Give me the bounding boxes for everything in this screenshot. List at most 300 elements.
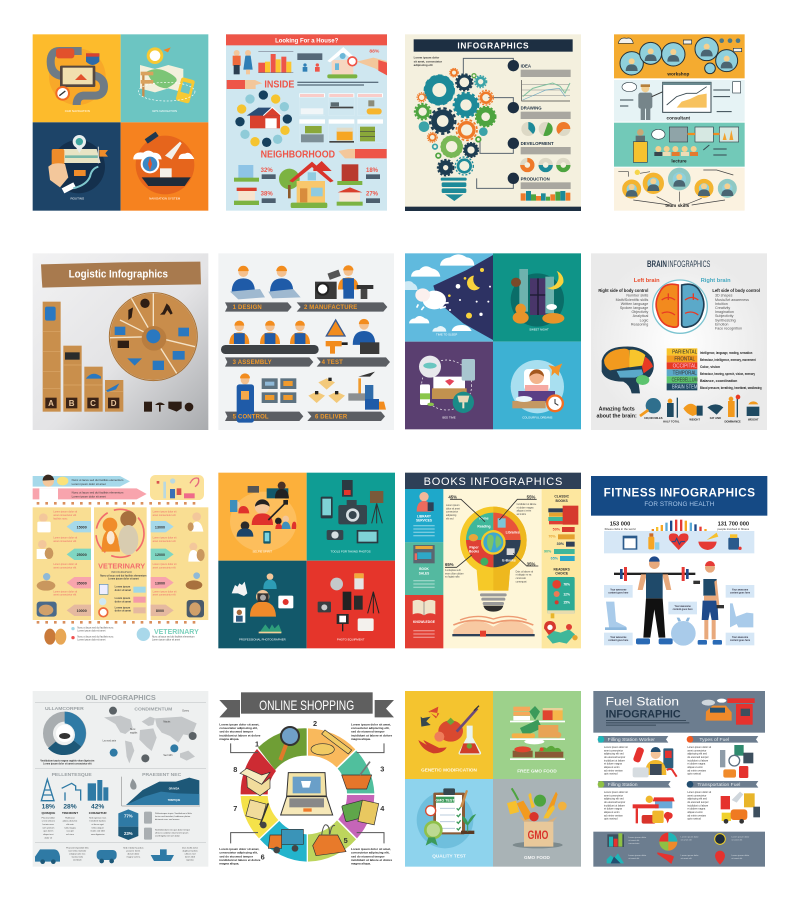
section body text: ad minim veniam [687, 814, 706, 817]
section body text: amet consectetur [604, 749, 623, 752]
left column: amet consectetur elit [53, 566, 77, 569]
centre column: dolor sit amet [115, 589, 131, 592]
centre column: INFOGRAPHIC [111, 570, 133, 574]
world map: Nunc [130, 729, 136, 731]
hexagon statistic: Pellentesque turpis. Vestibulum id felis [155, 812, 192, 815]
stat columns: tellus aliquet [92, 826, 104, 829]
step arrows [225, 302, 390, 421]
segment numbers: 3 [380, 764, 384, 773]
title: INFOGRAPHICS [457, 41, 529, 51]
connector lines [463, 58, 513, 188]
info callouts: content goes here [730, 591, 751, 594]
percent figures: 27% [366, 191, 379, 197]
section body text: Lorem ipsum dolor sit [687, 746, 711, 749]
text block [297, 53, 322, 72]
footer panel: sit amet elit [628, 857, 640, 860]
footer panel: sit amet elit [681, 857, 692, 860]
stat columns: platea dictumst [63, 820, 78, 823]
centre column: Lorem ipsum [115, 597, 131, 600]
percentage callouts: Lorem ipsum [446, 504, 460, 507]
world map: Sed nibh [163, 755, 173, 757]
left column: knowledge [405, 595, 443, 648]
percentage callouts: 55% [527, 495, 535, 500]
stat columns: sem dignissim [91, 834, 105, 836]
stat columns: CURABITUR [89, 811, 107, 815]
lobes table: OCCIPITAL [673, 364, 697, 370]
left column: book sales [405, 542, 443, 595]
section body text: quis nostrud [687, 773, 701, 776]
light bulb pie: E-Books [502, 559, 516, 563]
band: team skills: team skills [665, 203, 690, 208]
header: INFOGRAPHIC [606, 708, 681, 720]
lobes table: Color, vision [700, 365, 720, 369]
hexagon statistic: dictumst nunc sed massa [155, 818, 180, 821]
panel: oil infographics [33, 691, 208, 867]
stacked bars A-D: C [90, 399, 96, 408]
neighbourhood buildings [234, 164, 363, 206]
gmo food bag [507, 788, 567, 848]
statistics: people involved in fitness [718, 527, 750, 531]
centre column: Lorem ipsum [115, 586, 131, 589]
worker illustration [633, 747, 677, 777]
stat columns: at lacus eget [92, 823, 104, 826]
quality test clipboard: GMO TEST [435, 798, 455, 802]
info callouts: content goes here [730, 639, 751, 642]
left list: Objectivity [631, 310, 648, 314]
label: TOOLS FOR TAKING PHOTOS [331, 549, 371, 553]
right list: Face recognition [715, 327, 742, 331]
hexagon statistic: sed fringilla nisl sem dolor [155, 835, 180, 838]
percentage callouts: 65% [445, 562, 454, 567]
percentage callouts: Duis ut labore sit [516, 570, 533, 573]
right column: 13000 [155, 581, 165, 585]
footer panel: sit amet elit [731, 857, 743, 860]
vehicles row: Duis mollis tortor [182, 846, 198, 849]
left brain heading: Left brain [634, 278, 660, 284]
left column: Lorem ipsum dolor sit [53, 590, 77, 593]
light bulb pie: Paper [469, 545, 479, 549]
sweet night scene [511, 269, 564, 327]
right column: amet consectetur elit [153, 540, 176, 543]
open book [452, 616, 535, 637]
right list [712, 288, 760, 331]
world map: Donec [182, 711, 190, 713]
amazing facts: 100,000 MILES [644, 416, 663, 420]
stat columns: mattis sed nibh [90, 830, 106, 833]
vehicles row [35, 846, 198, 864]
corner text: sed do eiusmod tempor [351, 730, 385, 734]
right list: Subjectivity [715, 314, 734, 318]
section body text: aliqua ut enim [687, 811, 703, 814]
footer: Nunc ut lacus sed dui facilisis elementum [152, 636, 195, 639]
dotted dividers [37, 503, 197, 622]
left column: knowledge: KNOWLEDGE [413, 620, 436, 624]
footer panel: sit amet elit [681, 838, 692, 841]
stat columns [41, 772, 108, 839]
title: BOOKS INFOGRAPHICS [424, 476, 563, 488]
left column: Lorem ipsum dolor sit [53, 537, 77, 540]
right list: 3D shapes [715, 294, 733, 298]
header [593, 691, 765, 733]
right column: readers choice [544, 567, 578, 644]
vehicles row: dictum dolor [127, 852, 139, 855]
section body text: amet consectetur [687, 749, 707, 752]
light bulb pie: Reading [477, 525, 491, 529]
world map [103, 707, 197, 763]
title [405, 473, 581, 489]
left column: book sales: SALES [419, 571, 429, 575]
amazing facts: WEIGHT [748, 418, 759, 422]
right column [151, 511, 205, 617]
lobes table: Behaviour, hearing, speech, vision, memory [700, 372, 755, 376]
world map: Leo sed ante [103, 740, 117, 743]
info callouts: Your awesome [610, 637, 627, 639]
footer: Lorem ipsum dolor sit amet [152, 639, 180, 642]
icon: routing map [48, 135, 108, 193]
donut chart: ULLAMCORPER [45, 706, 84, 712]
coloured brain profile [602, 346, 654, 393]
header [591, 476, 767, 516]
top arrow banners: Nunc ut lacus sed dui facilisis elementum [72, 490, 124, 494]
icon: basket [342, 762, 372, 789]
vehicles row: lorem nibh [185, 855, 196, 858]
top arrow banners: Lorem ipsum dolor sit amet [72, 482, 106, 486]
right list: Synthesizing [715, 318, 736, 322]
amazing facts: Amazing facts [599, 407, 635, 413]
panel: fitness infographics [591, 476, 767, 646]
section body text: incididunt ut labore [687, 759, 709, 762]
title ribbon: ONLINE SHOPPING [259, 697, 354, 713]
percentage callouts: consequat [516, 580, 527, 583]
brain hemispheres [653, 280, 707, 333]
label: GMO FOOD [524, 855, 551, 860]
centre column: dolor sit amet [115, 600, 131, 603]
area chart [122, 772, 200, 806]
info callouts: content goes here [608, 591, 629, 594]
label: PHOTO EQUIPMENT [337, 637, 365, 641]
icon: navigation system [133, 132, 194, 194]
stat columns: 18% [42, 804, 55, 811]
manufacture [315, 265, 373, 299]
lobes table: BRAIN STEM [672, 385, 697, 391]
step: development: DEVELOPMENT [521, 141, 554, 146]
section body text: et dolore magna [604, 763, 623, 766]
world map: CONDIMENTUM [134, 707, 172, 713]
percentage callouts: esse cillum dolore [445, 572, 464, 575]
panel: veterinary infographic [33, 475, 208, 645]
step labels [233, 305, 357, 420]
percentage callouts: consectetur [446, 511, 458, 514]
title banner: Logistic Infographics [69, 269, 168, 281]
stat columns: quis lorem [43, 830, 54, 833]
icon: hammer and gavel [311, 730, 352, 755]
donut chart: Vestibulum turpis magna sagittis vitae dignissim [40, 759, 94, 762]
vehicles row: volutpat ante nec [69, 852, 86, 855]
icon: cards [342, 800, 379, 825]
icon: red house with room circles [235, 90, 292, 147]
section headers [598, 736, 758, 788]
heading bar: Looking For a House? [275, 38, 339, 44]
title [414, 39, 573, 52]
right column: classic books [544, 495, 578, 561]
section headers: Transportation Fuel [697, 782, 740, 788]
percentage callouts: 45% [448, 495, 457, 500]
vehicles row: sed diam [73, 859, 82, 861]
section body text [604, 746, 711, 821]
lobes table: PARIENTAL [672, 350, 697, 356]
corner text: sed do eiusmod tempor [219, 854, 254, 858]
right column: classic books: BOOKS [556, 499, 569, 503]
corner text: Lorem ipsum dolor sit amet, [351, 722, 391, 726]
title: BRAIN [647, 259, 667, 269]
lobes table [667, 348, 762, 391]
percent figures: 38% [261, 191, 273, 197]
selfie scene [230, 482, 297, 552]
left column: amet consectetur elit [53, 594, 77, 597]
corner text: incididunt ut labore et dolore [219, 858, 261, 862]
band: lecture [614, 123, 745, 167]
section body text: do eiusmod tempor [687, 801, 709, 804]
intro text: Lorem ipsum dolor [414, 56, 440, 60]
section body text: ad minim veniam [687, 769, 706, 772]
left list: Written language [621, 302, 648, 306]
label: GPS NAVIGATION [152, 109, 177, 113]
stat columns: 42% [91, 804, 104, 811]
station illustration [633, 796, 675, 824]
step: idea [521, 64, 571, 101]
room cards [299, 93, 383, 143]
stat columns: 28% [63, 804, 77, 811]
donut chart: Lorem ipsum dolor sit amet consectetur elit [43, 763, 92, 766]
segment numbers: 8 [233, 765, 237, 774]
left column: library services: LIBRARY [417, 514, 432, 518]
section headers: Types of Fuel [699, 737, 729, 743]
footer: Nunc ut lacus sed dui facilisis nunc [77, 636, 114, 639]
info callouts: Your awesome [675, 606, 691, 608]
corner text: consectetur adipiscing elit, [219, 726, 258, 730]
right column: 13000 [155, 525, 165, 529]
yellow columns [33, 507, 208, 620]
gear lightbulb [415, 68, 496, 201]
top arrow banners: Lorem ipsum dolor sit amet [72, 494, 106, 498]
label: ROUTING [70, 196, 85, 200]
left column: book sales: BOOK [419, 567, 429, 571]
left column: Lorem ipsum dolor sit [53, 511, 77, 514]
genetic modification scene [418, 706, 481, 755]
stacked bars A-D [43, 302, 123, 412]
statistics: fitness clubs in the world [605, 527, 636, 531]
label: SELFIE SPIRIT [253, 549, 272, 553]
section body text: adipiscing elit sed [687, 798, 708, 801]
info callouts: Your awesome [610, 589, 627, 591]
section body text: amet consectetur [687, 794, 707, 797]
section body text: Lorem ipsum dolor sit [604, 746, 628, 749]
corner text: magna aliqua. [351, 862, 371, 866]
corner text: sed do eiusmod tempor [351, 854, 385, 858]
footer panel: Lorem ipsum dolor [628, 836, 646, 839]
hexagon statistic [118, 809, 192, 840]
vehicles row: Sed et dolor faucibus [123, 846, 143, 849]
free gmo food shelves [510, 706, 565, 760]
step labels: 3 ASSEMBLY [233, 360, 272, 366]
footer panel: Lorem ipsum dolor [731, 854, 749, 857]
professional photographer scene [232, 573, 293, 633]
panel: looking for a house [226, 34, 387, 211]
corner text: incididunt ut labore et dolore [351, 733, 392, 737]
section headers: Filling Station Worker [608, 737, 655, 743]
percentage callouts: ad minim [517, 514, 526, 516]
stat columns: Habitasse [65, 816, 76, 819]
label: TIME TO SLEEP [436, 333, 457, 337]
right column: classic books: CLASSIC [554, 495, 570, 499]
right column: Lorem ipsum dolor sit [153, 590, 177, 593]
section headers: Filling Station [608, 782, 638, 788]
vehicles row: non tellus molestie [68, 849, 87, 852]
corner text: consectetur adipiscing elit, [219, 851, 258, 855]
heading bar [226, 34, 387, 45]
section body text: amet consectetur [604, 794, 623, 797]
stat columns: elit ante [66, 823, 75, 826]
light bulb pie: Libraries [506, 530, 520, 534]
left column: 25000 [77, 553, 87, 557]
section body text: incididunt ut labore [604, 759, 625, 762]
info callouts: content goes here [608, 639, 629, 642]
exercise equipment [605, 602, 753, 646]
right list: Music/Art awareness [715, 298, 749, 302]
band: workshop: workshop [666, 71, 689, 76]
stat columns: hendrerit facilisis [90, 820, 106, 823]
footer panel: Lorem ipsum dolor [731, 835, 749, 838]
area chart: PRAESENT NEC [142, 772, 182, 778]
panel: gears infographics [405, 34, 581, 211]
quality test clipboard [417, 788, 475, 848]
right column: 12000 [155, 553, 165, 557]
stat columns: ut est ultricies [42, 820, 55, 823]
label: PROFESSIONAL PHOTOGRAPHER [239, 637, 286, 641]
icon: shopping bag [313, 825, 346, 856]
label: COLOURFUL DREAMS [522, 415, 553, 419]
section body text: et dolore magna [604, 808, 623, 811]
section body text: adipiscing elit sed [604, 798, 624, 801]
percentage callouts: et aliquip ex ea [516, 574, 532, 577]
step: production [521, 176, 571, 201]
statistics: 131 700 000 [718, 522, 749, 528]
hexagon statistic: luctus sed tincidunt, habitasse platea [155, 815, 191, 818]
hexagon statistic: 23% [124, 831, 133, 836]
percentage callouts: dolor sit amet [446, 507, 460, 510]
light bulb pie: Home [479, 516, 489, 520]
left list: Logic [640, 318, 648, 322]
corner text: incididunt ut labore et dolore [219, 733, 261, 737]
corner text: magna aliqua. [351, 737, 371, 741]
footer panel: sit amet elit [731, 838, 743, 841]
top arrow banners [33, 475, 147, 500]
section body text: aliqua ut enim [604, 811, 619, 814]
hexagon statistic: 77% [124, 813, 133, 818]
amazing facts: about the brain: [597, 413, 637, 419]
panel: fuel station infographic [593, 691, 765, 867]
footer: VETERINARY [154, 629, 199, 636]
laptop [281, 773, 333, 815]
label: QUALITY TEST [432, 853, 466, 858]
dreams scene [511, 360, 564, 413]
delivery [308, 372, 386, 410]
statistics [605, 520, 750, 531]
step: drawing: DRAWING [521, 106, 542, 111]
vehicles row: lacinia nulla [72, 856, 84, 858]
intro text: adipiscing elit [414, 63, 433, 67]
section body text: do eiusmod tempor [687, 756, 709, 759]
inside heading [227, 80, 378, 91]
world map: Mauris [163, 721, 171, 724]
area chart: TRISTIQUE [168, 800, 181, 802]
icon: house with magnifier [327, 47, 387, 78]
title banner [41, 262, 201, 288]
label: SWEET NIGHT [529, 327, 549, 331]
footer panel: Lorem ipsum dolor [681, 854, 699, 857]
panel: sleep [405, 253, 581, 429]
info callouts: content goes here [673, 608, 693, 611]
amazing facts: WEIGHT [689, 418, 700, 422]
left column: library services [405, 489, 443, 542]
right column: readers choice: 76% [563, 583, 570, 587]
quality control [237, 373, 296, 423]
lobes table: TEMPORAL [673, 371, 697, 377]
title: OIL INFOGRAPHICS [86, 693, 156, 702]
fuel types illustration [720, 745, 753, 778]
step: idea: IDEA [521, 64, 532, 69]
lobes table: FRONTAL [674, 357, 695, 363]
step labels: 2 MANUFACTURE [304, 305, 357, 311]
step icons [508, 60, 519, 184]
stat columns: TINCIDUNT [62, 811, 78, 815]
amazing facts: HALF TOTAL [663, 419, 680, 423]
light bulb pie: Books [469, 550, 479, 554]
panel: books infographics [405, 473, 581, 648]
panel: online shopping [219, 692, 394, 866]
centre column: dolor sit amet [115, 610, 131, 613]
segment numbers: 1 [255, 740, 259, 749]
right column: classic books: 70% [548, 535, 556, 539]
design workers [230, 266, 301, 299]
percent figures: 32% [261, 168, 273, 174]
right column: readers choice: 15% [563, 601, 570, 605]
footer: Lorem ipsum dolor sit amet [77, 630, 106, 633]
label: CAR NAVIGATION [65, 109, 90, 113]
top arrow banners: Nunc ut lacus sed dui facilisis elementum [72, 478, 124, 482]
section body text: do eiusmod tempor [604, 756, 625, 759]
icon: car navigation road and screen [49, 48, 106, 105]
section body text: aliqua ut enim [687, 766, 703, 769]
section body text: Lorem ipsum dolor sit [604, 791, 628, 794]
left list: Reasoning [631, 323, 648, 327]
info callouts [604, 585, 754, 645]
stat columns: PELLENTESQUE [52, 772, 92, 778]
stat columns: vel risus [66, 833, 74, 836]
band: team skills [614, 168, 745, 211]
section body text: incididunt ut labore [604, 804, 625, 807]
vehicles row: Praesent imperdiet felis [66, 846, 89, 849]
step labels: 1 DESIGN [233, 305, 262, 311]
vehicles row: ultrices nisl [185, 852, 196, 855]
right column: classic books: 65% [551, 557, 559, 561]
icon: magnifier [280, 727, 299, 760]
section body text: et dolore magna [687, 763, 706, 766]
vehicles row: dapibus facilisis [182, 850, 198, 852]
percentage callouts: A voluptas velit [445, 569, 461, 572]
step: production: PRODUCTION [521, 176, 550, 181]
right column: readers choice: CHOICE [555, 572, 569, 576]
